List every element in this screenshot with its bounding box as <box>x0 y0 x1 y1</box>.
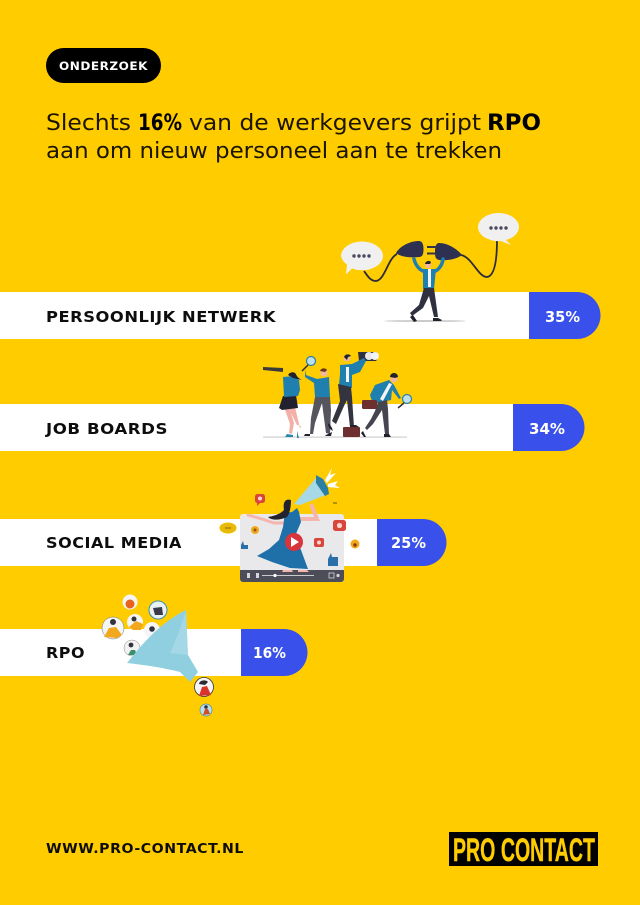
bar: persoonlijk netwerk 35%: 35% <box>545 308 580 326</box>
person with magnifier <box>302 356 332 436</box>
title: aan om nieuw personeel aan te trekken <box>46 139 502 164</box>
title <box>46 111 541 164</box>
title: van de werkgevers grijpt <box>189 111 481 136</box>
icon: team searching <box>263 352 412 438</box>
bar: job boards 34%: JOB BOARDS <box>45 420 168 438</box>
bar: persoonlijk netwerk 35% <box>0 292 600 339</box>
title: RPO <box>487 111 541 136</box>
person with telescope <box>263 367 302 438</box>
website url: WWW.PRO-CONTACT.NL <box>46 842 244 857</box>
bar: rpo 16%: RPO <box>46 644 85 662</box>
person with binoculars on case <box>328 352 379 437</box>
icon: video with megaphone woman <box>220 468 360 582</box>
icon: man connecting plugs <box>341 213 519 322</box>
bar: social media 25%: 25% <box>391 534 426 552</box>
bar: rpo 16%: 16% <box>253 644 286 662</box>
bar: social media 25%: SOCIAL MEDIA <box>46 534 182 552</box>
tag: onderzoek <box>46 48 161 83</box>
title: 16% <box>138 111 182 136</box>
bar: job boards 34% <box>0 404 584 451</box>
bar: persoonlijk netwerk 35%: PERSOONLIJK NETWERK <box>46 308 277 326</box>
person with briefcase <box>361 373 412 437</box>
tag: onderzoek: ONDERZOEK <box>59 59 149 73</box>
bar: job boards 34%: 34% <box>529 420 565 438</box>
bar: social media 25% <box>0 519 446 566</box>
bar: rpo 16% <box>0 629 308 676</box>
icon: recruitment funnel <box>102 594 214 716</box>
title: Slechts <box>46 111 131 136</box>
